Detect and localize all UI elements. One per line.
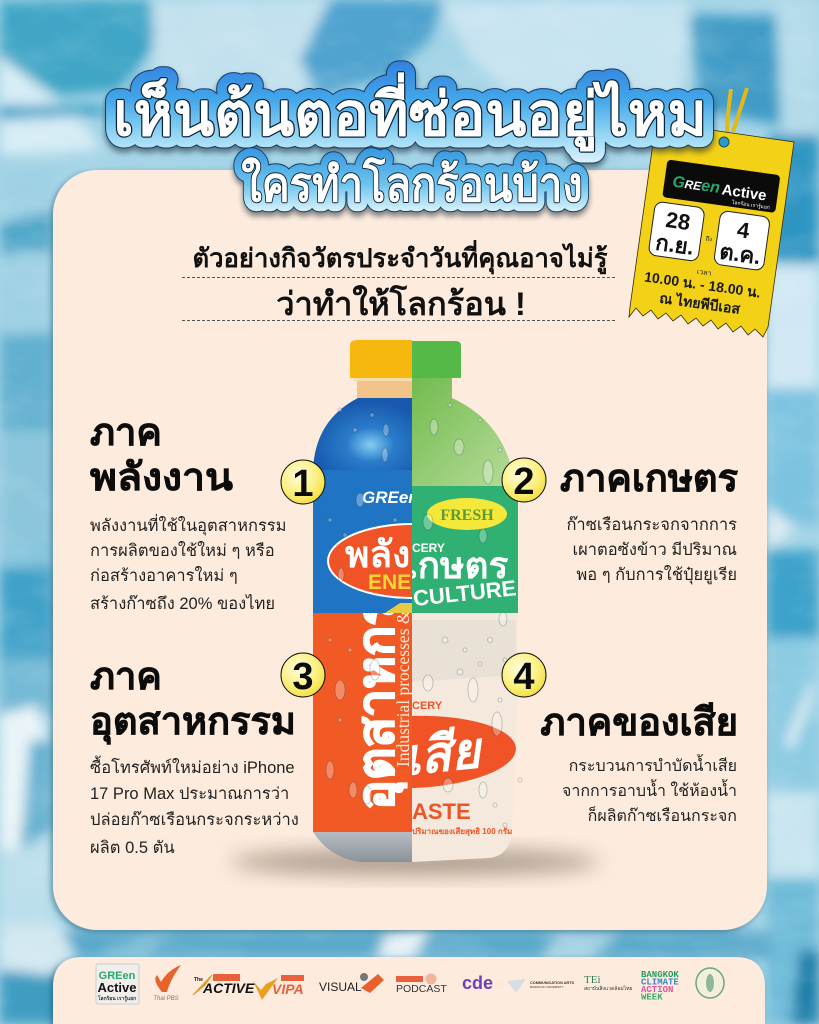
logo: TEI: TEi xyxy=(584,974,600,986)
bottle shadow xyxy=(230,849,600,875)
logo: Green Active: Active xyxy=(97,980,137,995)
bottle left half: อุตสาหกรรม xyxy=(348,539,407,810)
section 3: industry: ภาค xyxy=(90,656,162,698)
section 1: energy: การผลิตของใช้ใหม่ ๆ หรือ xyxy=(90,541,275,560)
logo: Bangkok Climate Action Week: BANGKOK xyxy=(641,970,679,980)
tag date end xyxy=(713,210,770,271)
bottle left half xyxy=(313,340,412,862)
date tag xyxy=(629,88,794,337)
section 3: industry: ซื้อโทรศัพท์ใหม่อย่าง iPhone xyxy=(90,755,295,777)
logo: Green Active: โลกร้อน เรารู้แยก xyxy=(97,995,136,1003)
bottle right half xyxy=(412,341,518,862)
bottle right half: เกษตร xyxy=(405,545,508,586)
subtitle: ตัวอย่างกิจวัตรประจำวันที่คุณอาจไม่รู้ xyxy=(192,239,608,275)
tag time and venue: เวลา xyxy=(696,269,712,278)
panel: logo footer strip xyxy=(53,957,765,1024)
logo: Communication Arts: BANGKOK UNIVERSITY xyxy=(530,985,564,989)
bottle left half: GREen xyxy=(362,488,419,507)
tag eyelet xyxy=(719,137,729,147)
section 3: industry: อุตสาหกรรม xyxy=(90,701,296,745)
bottle right half: ASTE xyxy=(412,799,471,824)
logo: VIPA xyxy=(253,975,304,1000)
tag date end: ต.ค. xyxy=(718,239,762,269)
title line 1: เห็นต้นตอที่ซ่อนอยู่ไหม xyxy=(113,72,707,152)
tag logo: Active xyxy=(721,181,768,205)
bottle left half: ENERGY xyxy=(368,571,457,594)
logo: Green Active: GREen xyxy=(99,970,136,982)
bottle left half: พลัง xyxy=(345,534,410,575)
logo: BMA seal xyxy=(696,968,724,998)
section 2: agriculture: ก๊าซเรือนกระจกจากการ xyxy=(566,515,737,534)
section 1: energy: พลังงานที่ใช้ในอุตสาหกรรม xyxy=(90,514,287,536)
number badge 3: 3 xyxy=(292,656,314,698)
section 4: waste: ภาคของเสีย xyxy=(540,702,738,744)
number badge 2 xyxy=(502,458,546,503)
logo: Bangkok Climate Action Week: CLIMATE xyxy=(641,978,679,988)
tag date start: ก.ย. xyxy=(654,230,695,260)
section 1: energy: ภาค xyxy=(90,412,162,454)
bottle right half: FRESH xyxy=(440,507,494,524)
panel: main cream card xyxy=(53,170,767,930)
title line 2: ใครทำโลกร้อนบ้าง xyxy=(241,156,583,212)
bottle right half: ปริมาณของเสียสุทธิ 100 กรัม xyxy=(412,826,512,837)
logo: The Visual xyxy=(319,973,384,994)
tag logo xyxy=(662,159,780,213)
tag time and venue xyxy=(641,262,763,319)
tag string xyxy=(727,88,747,132)
number badge 4: 4 xyxy=(513,656,535,698)
logo: Green Active xyxy=(96,964,139,1004)
logo: The Visual: VISUAL xyxy=(319,980,362,994)
logo: The Active xyxy=(193,974,255,996)
tag date start: 28 xyxy=(664,207,692,235)
logo: Podcast xyxy=(396,974,447,995)
title line 1: เห็นต้นตอที่ซ่อนอยู่ไหม xyxy=(113,72,707,152)
section 4: waste xyxy=(540,702,738,825)
number badge 3 xyxy=(281,653,325,698)
section 2: agriculture: ภาคเกษตร xyxy=(560,458,739,500)
bottle left half: Industrial processes & xyxy=(393,610,413,767)
tag time and venue: ณ ไทยพีบีเอส xyxy=(658,289,742,317)
partner logos xyxy=(96,964,724,1004)
bottle right half: CULTURE xyxy=(412,575,517,611)
logo: TEI xyxy=(584,974,632,992)
logo: Bangkok Climate Action Week: WEEK xyxy=(641,992,663,1002)
section 1: energy: ก่อสร้างอาคารใหม่ ๆ xyxy=(90,566,238,585)
section 2: agriculture xyxy=(560,458,739,585)
water droplets xyxy=(326,403,522,827)
tag logo: GREen xyxy=(671,173,721,197)
number badge 1 xyxy=(281,460,325,505)
section 3: industry xyxy=(90,656,299,857)
logo: Thai PBS: Thai PBS xyxy=(153,996,179,1002)
subtitle: ว่าทำให้โลกร้อน ! xyxy=(276,284,526,322)
tag body xyxy=(629,122,794,337)
bottle right half: CERY xyxy=(412,541,445,555)
logo: Thai PBS xyxy=(153,965,181,1002)
logo: The Active: ACTIVE xyxy=(202,980,255,996)
section 3: industry: ปล่อยก๊าซเรือนกระจกระหว่าง xyxy=(90,810,299,829)
logo: Communication Arts: COMMUNICATION ARTS xyxy=(530,981,575,985)
title line 2: ใครทำโลกร้อนบ้าง xyxy=(241,156,583,212)
section 3: industry: ผลิต 0.5 ตัน xyxy=(90,839,175,857)
tag date end: 4 xyxy=(736,217,752,244)
tag time and venue: 10.00 น. - 18.00 น. xyxy=(643,268,762,301)
section 2: agriculture: พอ ๆ กับการใช้ปุ๋ยยูเรีย xyxy=(576,565,737,585)
logo: CDE: cde xyxy=(462,973,493,993)
section 1: energy: สร้างก๊าซถึง 20% ของไทย xyxy=(90,594,275,613)
section 3: industry: 17 Pro Max ประมาณการว่า xyxy=(90,785,289,803)
logo: Podcast: PODCAST xyxy=(396,983,447,995)
bottle right half: CERY xyxy=(412,700,443,712)
section 4: waste: กระบวนการบำบัดน้ำเสีย xyxy=(569,754,737,775)
number badge 4 xyxy=(502,653,546,698)
tag date start xyxy=(648,201,705,262)
section 1: energy xyxy=(90,412,287,613)
bottle right half: เสีย xyxy=(400,722,487,786)
logo: TEI: สถาบันสิ่งแวดล้อมไทย xyxy=(584,985,632,992)
tag date connector: ถึง xyxy=(705,236,713,243)
section 2: agriculture: เผาตอซังข้าว มีปริมาณ xyxy=(572,541,737,559)
tag logo: โลกร้อน เรารู้แยก xyxy=(731,199,770,211)
number badge 1: 1 xyxy=(292,463,314,505)
title line 1: เห็นต้นตอที่ซ่อนอยู่ไหม xyxy=(113,72,707,152)
logo: Bangkok Climate Action Week: ACTION xyxy=(641,985,673,995)
logo: The Active: The xyxy=(194,977,203,983)
section 1: energy: พลังงาน xyxy=(90,457,233,499)
section 4: waste: จากการอาบน้ำ ใช้ห้องน้ำ xyxy=(562,779,737,800)
logo: Communication Arts xyxy=(507,979,575,993)
bottle xyxy=(307,340,522,862)
logo: VIPA: VIPA xyxy=(272,981,304,997)
logo: Bangkok Climate Action Week xyxy=(641,970,679,1002)
title line 2: ใครทำโลกร้อนบ้าง xyxy=(241,156,583,212)
subtitle xyxy=(182,239,617,322)
section 4: waste: ก็ผลิตก๊าซเรือนกระจก xyxy=(588,805,737,825)
number badge 2: 2 xyxy=(513,461,535,503)
